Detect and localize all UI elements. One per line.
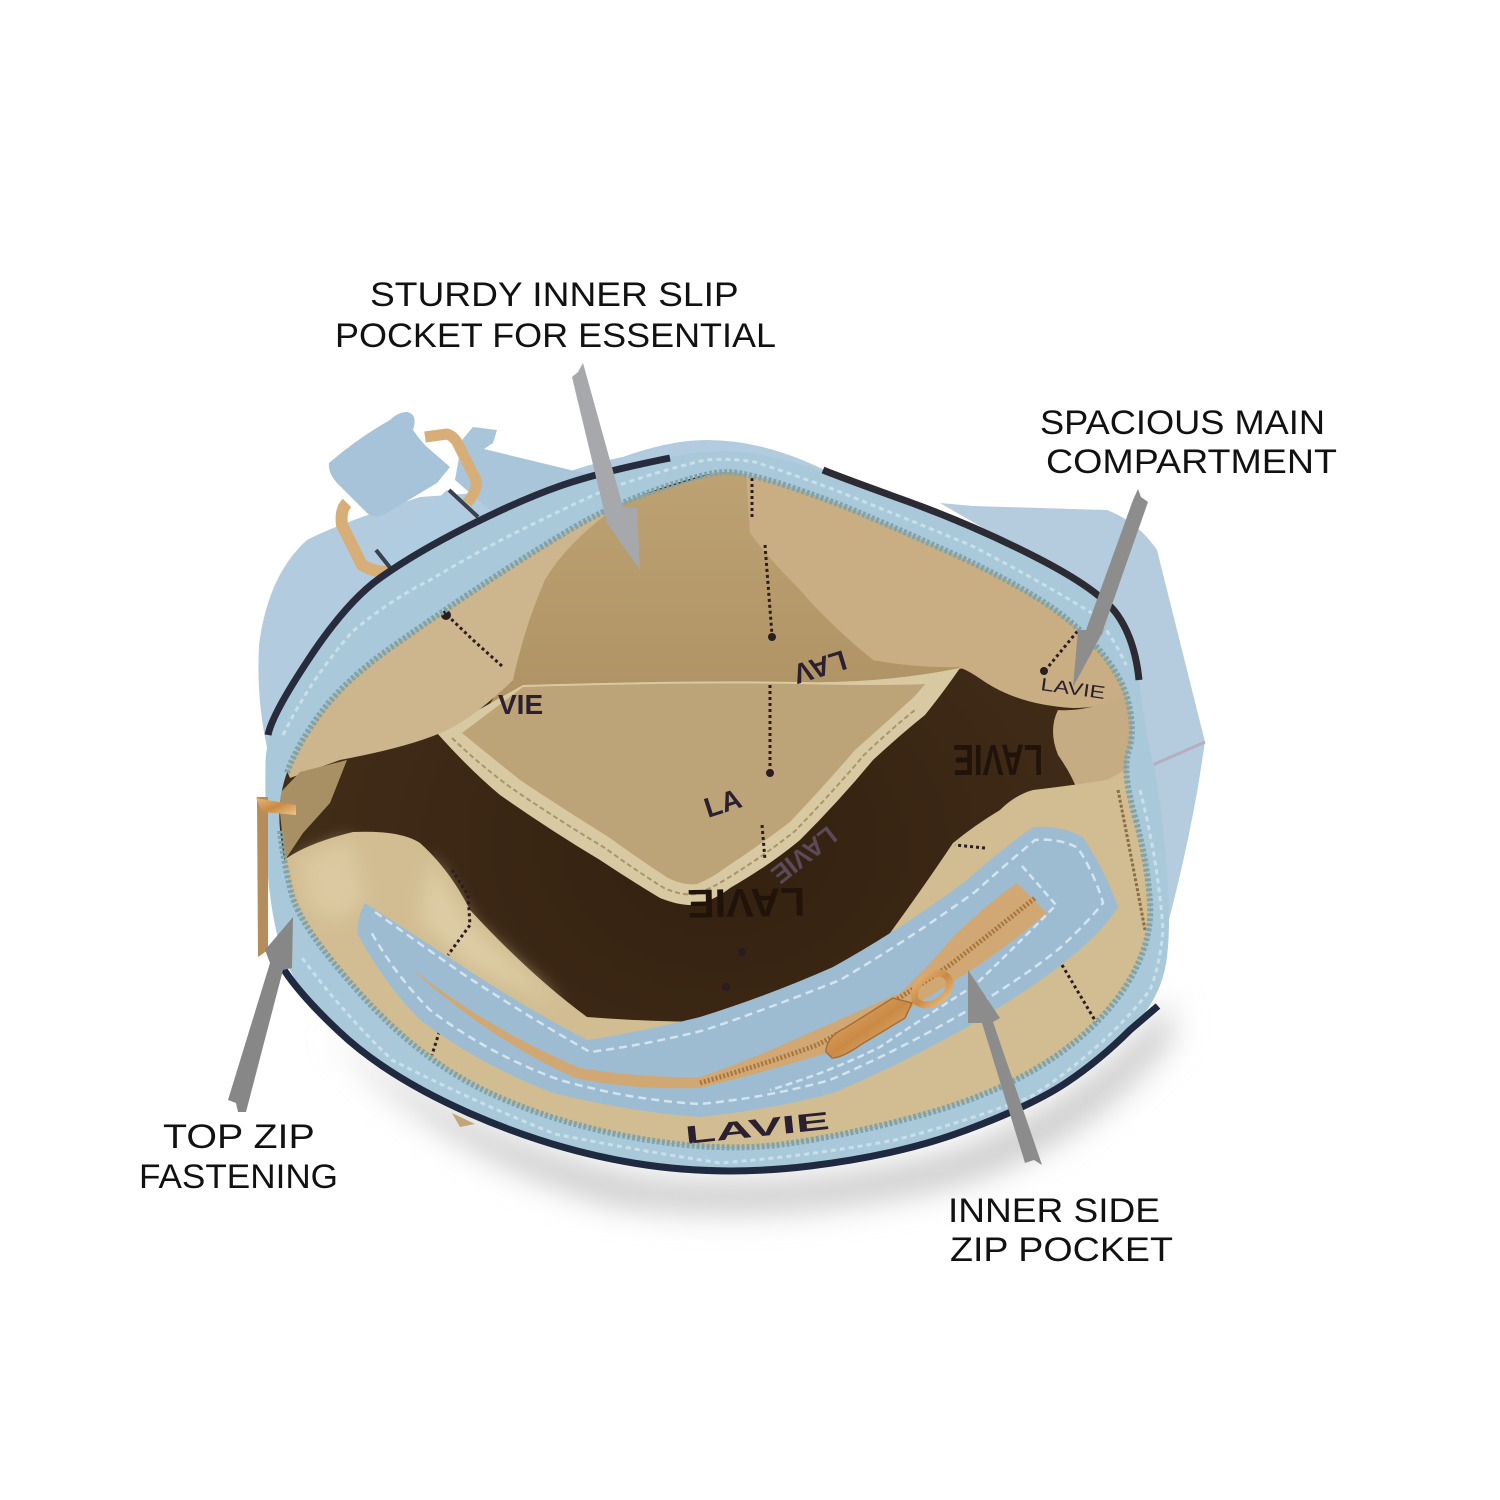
gold ring upper	[425, 434, 476, 503]
label: top zip fastening: FASTENING	[139, 1158, 338, 1196]
side zip teeth	[700, 898, 1035, 1083]
monogram lines	[432, 472, 1096, 1055]
arrow: side zip pocket	[968, 970, 1042, 1165]
illustration: open bag	[256, 412, 1205, 1180]
lining logos: LAVIE	[1039, 674, 1107, 703]
lining logos	[498, 644, 1107, 1150]
right lining stitch	[1118, 790, 1145, 930]
back wall lining	[490, 472, 962, 704]
upper lining left	[288, 512, 605, 778]
zip band stitch	[283, 459, 1163, 1163]
label: spacious main compartment: SPACIOUS MAIN	[1040, 404, 1325, 442]
lining logos: LA	[700, 783, 745, 824]
zip stitch	[770, 866, 1056, 1090]
upper lining right	[746, 474, 1127, 708]
left fray lining	[278, 760, 347, 860]
label: spacious main compartment: COMPARTMENT	[1046, 443, 1337, 481]
dark rim bottom	[281, 965, 1158, 1171]
label: top zip fastening: TOP ZIP	[163, 1118, 314, 1156]
side zip pocket tape	[408, 883, 1047, 1088]
strap lower tab	[373, 490, 473, 573]
lining logos: LAV	[789, 644, 850, 690]
bottom lining	[284, 770, 1150, 1148]
lining logos: LAVIE	[953, 735, 1043, 784]
dark rim top right	[823, 470, 1139, 680]
lining logos: LAVIE	[684, 1107, 831, 1150]
arrow: main compartment	[1073, 489, 1148, 687]
monogram dots	[441, 610, 1048, 991]
zip band	[265, 451, 1169, 1171]
small bottom tab	[452, 1113, 475, 1127]
back panel left	[258, 440, 840, 752]
strap buckle edge	[376, 490, 478, 575]
back panel right	[940, 503, 1205, 927]
label: sturdy inner slip pocket: STURDY INNER SLIP	[370, 276, 738, 314]
lining logos: LAVIE	[765, 820, 843, 890]
dark rim top left	[268, 458, 670, 735]
label: inner side zip pocket: INNER SIDE	[948, 1192, 1160, 1230]
strap loop	[329, 412, 450, 516]
lining shading	[300, 840, 365, 920]
arrow: inner slip pocket	[572, 363, 640, 570]
slip pocket	[437, 668, 960, 905]
gold slider	[256, 798, 296, 815]
bag shadow	[330, 1000, 1170, 1212]
zip puller	[826, 973, 950, 1058]
lining logos: VIE	[498, 689, 543, 720]
inner pocket strip	[357, 827, 1118, 1117]
right column lining	[1053, 699, 1132, 786]
label: inner side zip pocket: ZIP POCKET	[950, 1231, 1173, 1269]
gold ring lower	[342, 503, 392, 572]
pocket seam stitch	[452, 710, 915, 894]
dark interior	[279, 472, 1150, 1148]
zip teeth line	[280, 472, 1150, 1147]
lining highlight	[420, 860, 560, 1005]
arrow: top zip	[228, 917, 293, 1112]
strip stitching	[370, 840, 1103, 1104]
strap rear tab	[455, 427, 600, 513]
panel seam	[1148, 742, 1205, 767]
gold zip clip	[257, 797, 268, 957]
lining logos: LAVIE	[687, 879, 806, 925]
label: sturdy inner slip pocket: POCKET FOR ESSENTIAL	[335, 317, 776, 355]
interior opening	[279, 472, 1150, 1148]
